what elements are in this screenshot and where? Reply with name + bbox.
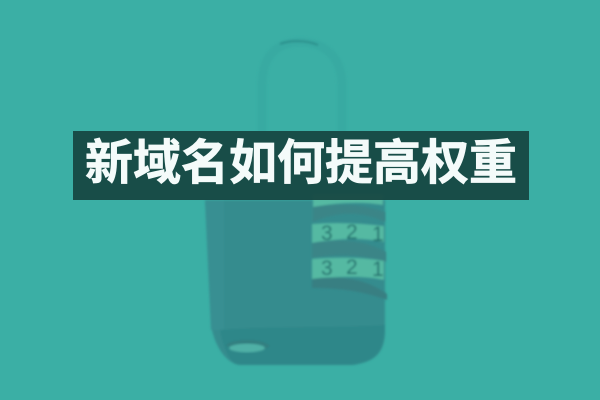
- dial bottom: 1: [372, 258, 384, 281]
- dial bottom: 2: [346, 256, 358, 279]
- dial bottom: 3: [321, 257, 333, 280]
- dial bottom: [312, 256, 387, 300]
- dial top: [313, 195, 385, 222]
- title banner: [73, 131, 529, 200]
- icon: padlock body: [205, 200, 385, 365]
- dial middle: 2: [346, 221, 358, 244]
- combination dials: [312, 195, 387, 300]
- icon: padlock shackle: [262, 41, 342, 135]
- title: 新域名如何提高权重: [85, 137, 517, 190]
- icon: keyhole highlight: [229, 344, 265, 352]
- dial middle: [312, 221, 386, 262]
- dial middle: 1: [372, 223, 384, 246]
- dial middle: 3: [321, 222, 333, 245]
